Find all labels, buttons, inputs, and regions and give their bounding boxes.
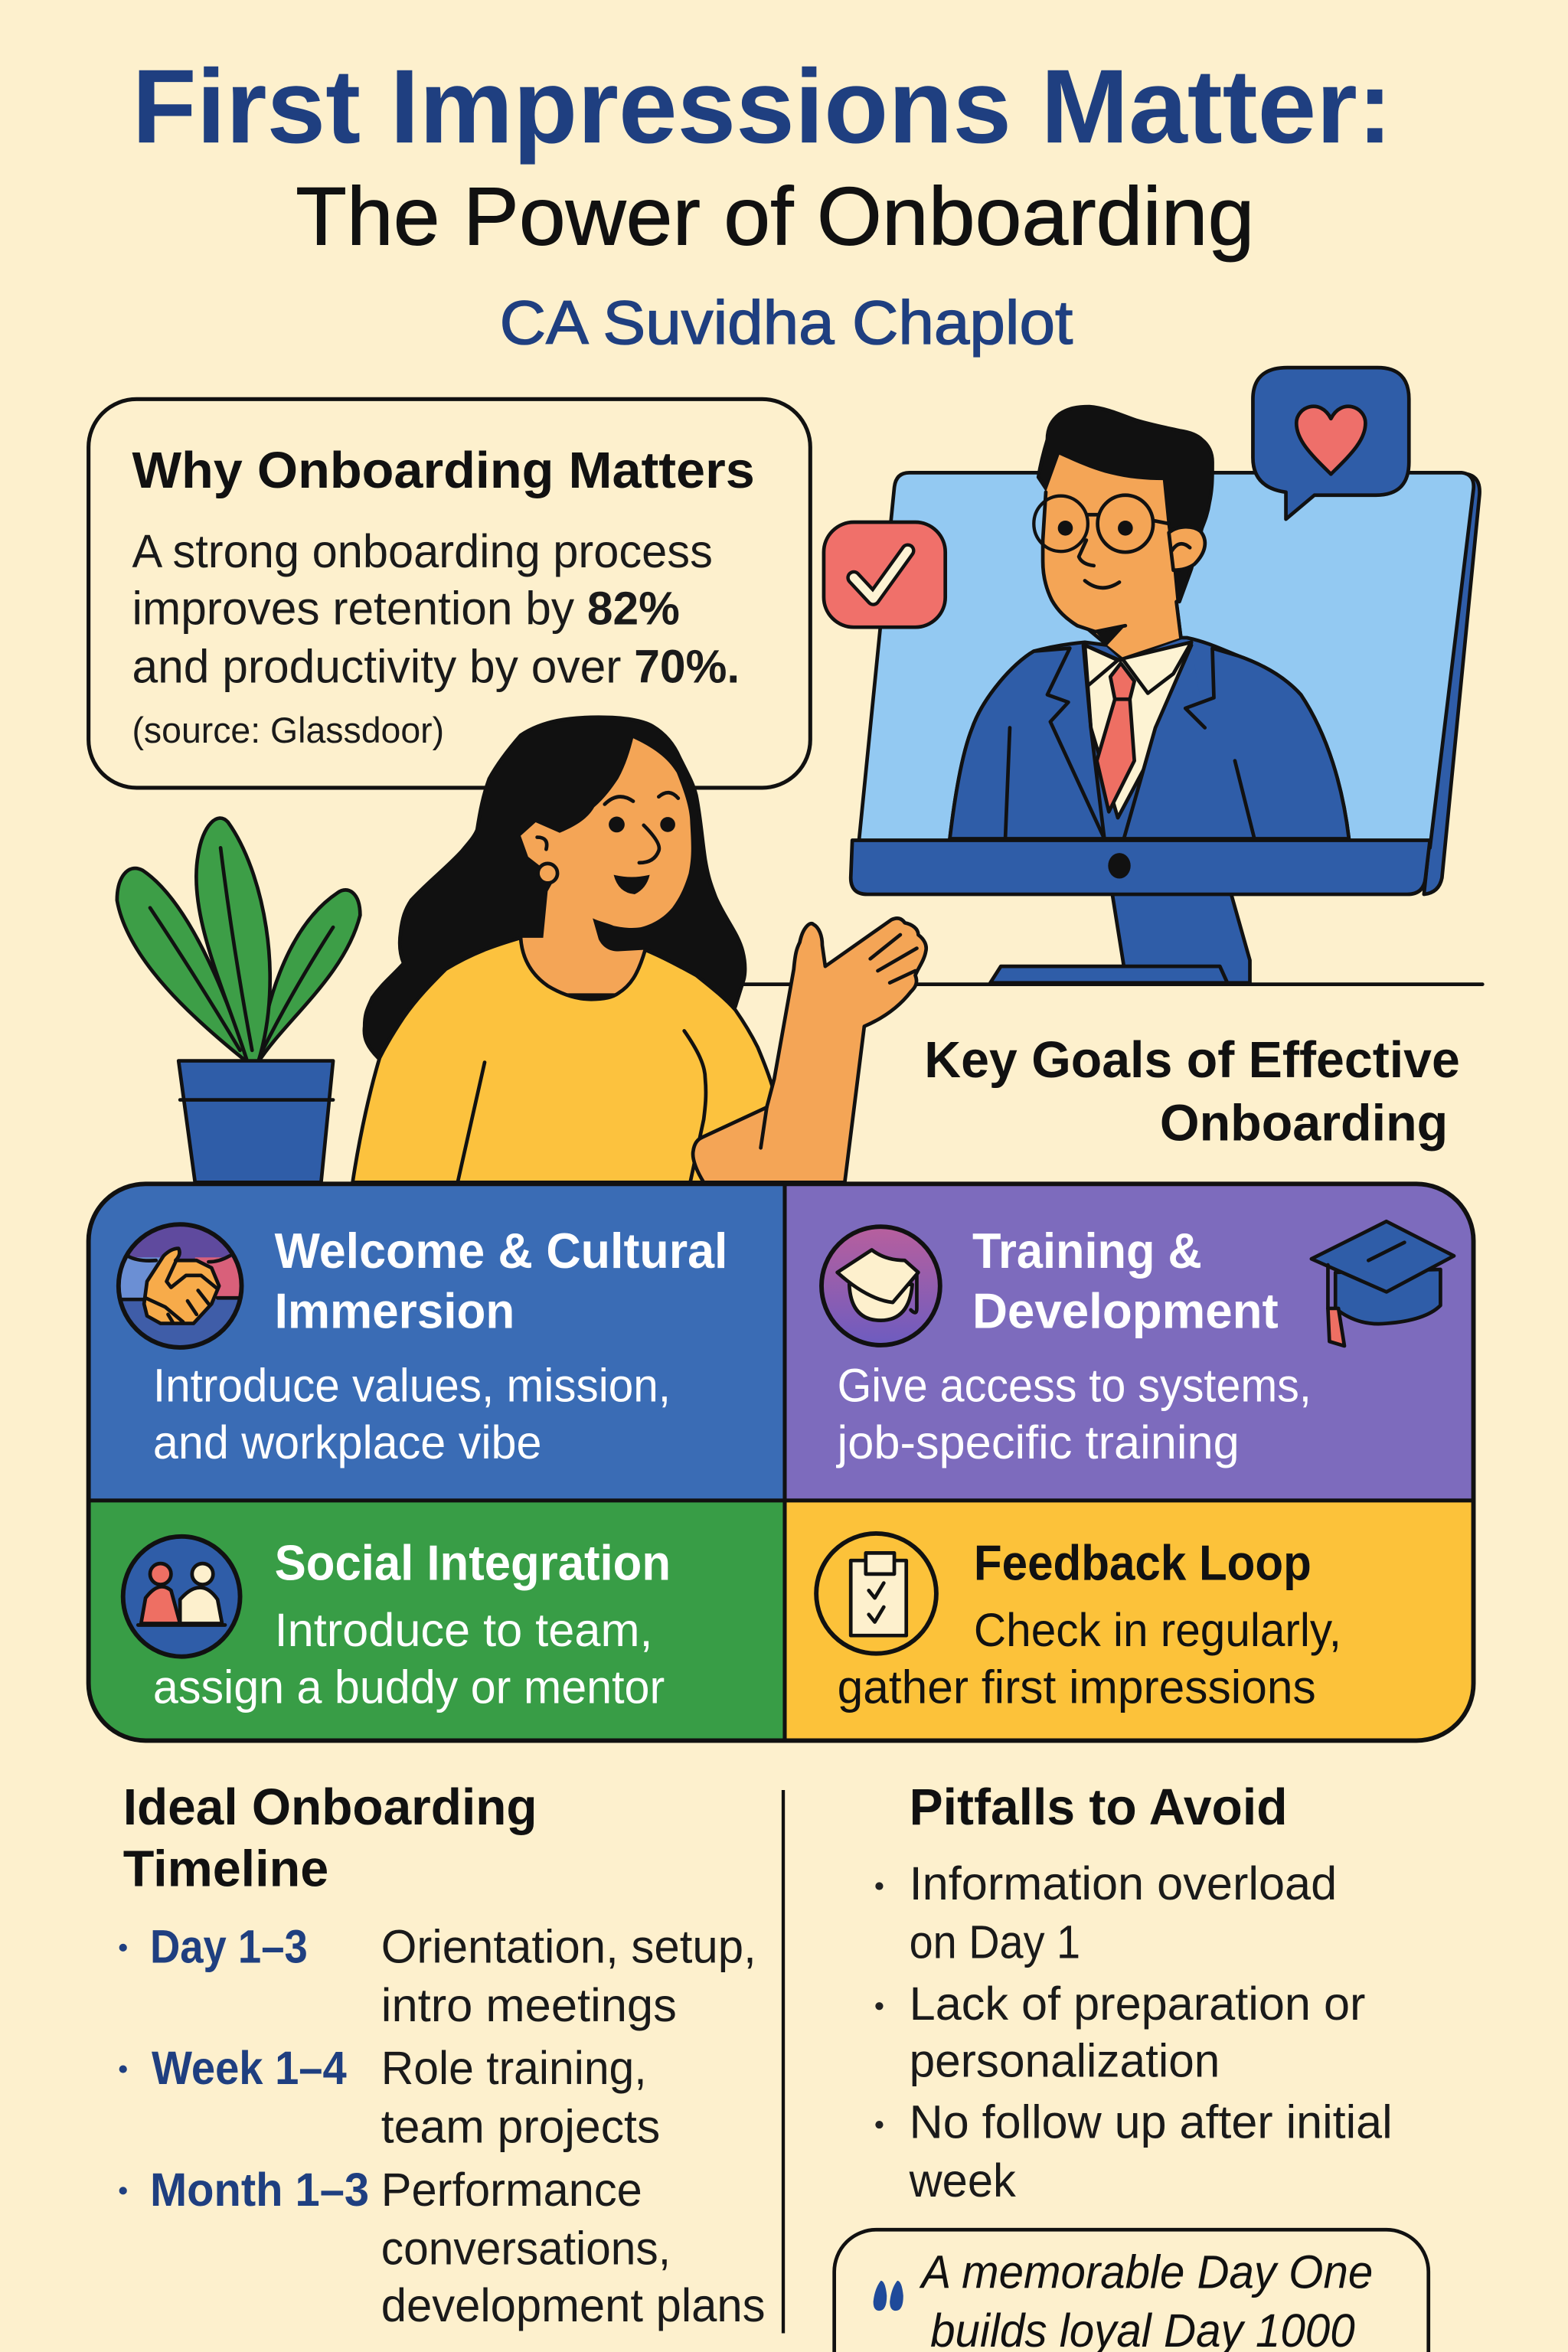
pitfall: lack of preparation: Lack of preparation or xyxy=(910,1978,1365,2030)
timeline: day 1-3: Orientation, setup, xyxy=(381,1920,756,1972)
woman arm xyxy=(693,918,926,1182)
goal text xyxy=(153,1604,665,1713)
timeline: month 1-3: conversations, xyxy=(381,2222,671,2274)
timeline: day 1-3: Day 1–3 xyxy=(150,1920,308,1972)
pitfall: information overload: on Day 1 xyxy=(910,1916,1080,1968)
timeline: week 1-4: Role training, xyxy=(381,2042,647,2094)
goal heading xyxy=(275,1223,728,1338)
goal heading xyxy=(972,1223,1279,1338)
heading: key goals xyxy=(924,1032,1460,1152)
title: First Impressions Matter: xyxy=(132,48,1393,165)
man xyxy=(950,407,1349,839)
quote text xyxy=(919,2246,1373,2352)
pitfall: no follow up xyxy=(875,2096,1393,2207)
text: source: (source: Glassdoor) xyxy=(132,710,444,750)
timeline: day 1-3 xyxy=(119,1920,756,2031)
timeline: month 1-3: development plans xyxy=(381,2279,766,2331)
goal text: Give access to systems, xyxy=(838,1359,1312,1411)
pitfall: lack of preparation: personalization xyxy=(910,2034,1220,2086)
subtitle: The Power of Onboarding xyxy=(296,169,1254,262)
illustration: monitor with man on video call xyxy=(738,407,1482,985)
heading: key goals: Key Goals of Effective xyxy=(924,1032,1460,1089)
timeline: week 1-4: Week 1–4 xyxy=(152,2042,347,2094)
goal text: and workplace vibe xyxy=(153,1416,541,1468)
heading: timeline: Timeline xyxy=(123,1841,328,1897)
pitfall: lack of preparation xyxy=(875,1978,1365,2086)
timeline: month 1-3: Performance xyxy=(381,2164,642,2216)
monitor screen xyxy=(858,472,1480,894)
goal heading: Welcome & Cultural xyxy=(275,1223,728,1279)
illustration: woman xyxy=(353,717,926,1182)
icon: clipboard xyxy=(816,1534,936,1654)
illustration: plant xyxy=(117,818,360,1182)
goal heading: Feedback Loop xyxy=(974,1535,1312,1591)
heading: why onboarding matters: Why Onboarding Matters xyxy=(132,443,755,499)
icon: handshake xyxy=(119,1223,242,1349)
goal heading: Development xyxy=(972,1282,1279,1338)
icon: check badge xyxy=(824,522,946,627)
icon: speech bubble with heart xyxy=(1253,368,1409,519)
goal text xyxy=(838,1604,1341,1713)
panel: pitfalls to avoid xyxy=(875,1779,1393,2207)
woman shirt xyxy=(353,938,773,1182)
quote text: A memorable Day One xyxy=(919,2246,1373,2298)
goal text: assign a buddy or mentor xyxy=(153,1661,665,1713)
icon: book cap xyxy=(822,1227,940,1345)
author: CA Suvidha Chaplot xyxy=(500,289,1073,358)
text: onboarding statistics xyxy=(132,525,740,693)
timeline: month 1-3: Month 1–3 xyxy=(150,2164,369,2216)
icon: graduation cap xyxy=(1312,1221,1454,1346)
icon: quote marks xyxy=(874,2281,903,2311)
text: onboarding statistics: A strong onboarding process xyxy=(132,525,713,577)
goal: feedback loop xyxy=(816,1534,1341,1713)
text: onboarding statistics: and productivity by over 70%. xyxy=(132,641,740,693)
timeline: week 1-4: team projects xyxy=(381,2101,660,2153)
goal text: Introduce to team, xyxy=(275,1604,653,1656)
heading: timeline: Ideal Onboarding xyxy=(123,1779,537,1836)
pitfall: information overload xyxy=(875,1857,1337,1968)
icon: two people xyxy=(123,1537,240,1657)
goal: training and development xyxy=(822,1221,1454,1468)
timeline: week 1-4 xyxy=(119,2042,660,2153)
goal text: job-specific training xyxy=(836,1416,1240,1468)
monitor bezel xyxy=(851,840,1430,894)
plant leaves xyxy=(117,818,360,1063)
pitfall: no follow up: week xyxy=(909,2154,1016,2207)
heading: key goals: Onboarding xyxy=(1160,1095,1448,1152)
goal heading: Social Integration xyxy=(275,1535,671,1591)
goal text xyxy=(836,1359,1312,1468)
heading: pitfalls: Pitfalls to Avoid xyxy=(910,1779,1288,1836)
timeline: month 1-3 xyxy=(119,2164,766,2331)
pitfall: no follow up: No follow up after initial xyxy=(910,2096,1393,2148)
panel: key goals grid xyxy=(89,1184,1474,1740)
pitfall: information overload: Information overload xyxy=(910,1857,1337,1909)
callout: quote xyxy=(835,2230,1429,2352)
goal text: gather first impressions xyxy=(838,1661,1316,1713)
goal text: Introduce values, mission, xyxy=(153,1359,671,1411)
panel: ideal onboarding timeline xyxy=(119,1779,766,2331)
goal: social integration xyxy=(123,1535,671,1713)
panel: why onboarding matters xyxy=(89,399,810,788)
goal heading: Immersion xyxy=(275,1282,514,1338)
goal heading: Training & xyxy=(972,1223,1202,1279)
text: onboarding statistics: improves retention by 82% xyxy=(132,582,680,634)
timeline: day 1-3: intro meetings xyxy=(381,1979,677,2031)
goal text xyxy=(153,1359,671,1468)
desk line xyxy=(738,983,1482,985)
goal: welcome and cultural immersion xyxy=(119,1223,728,1468)
plant pot xyxy=(178,1061,333,1182)
goal text: Check in regularly, xyxy=(974,1604,1341,1656)
heading: timeline xyxy=(123,1779,537,1897)
monitor stand xyxy=(990,891,1250,983)
